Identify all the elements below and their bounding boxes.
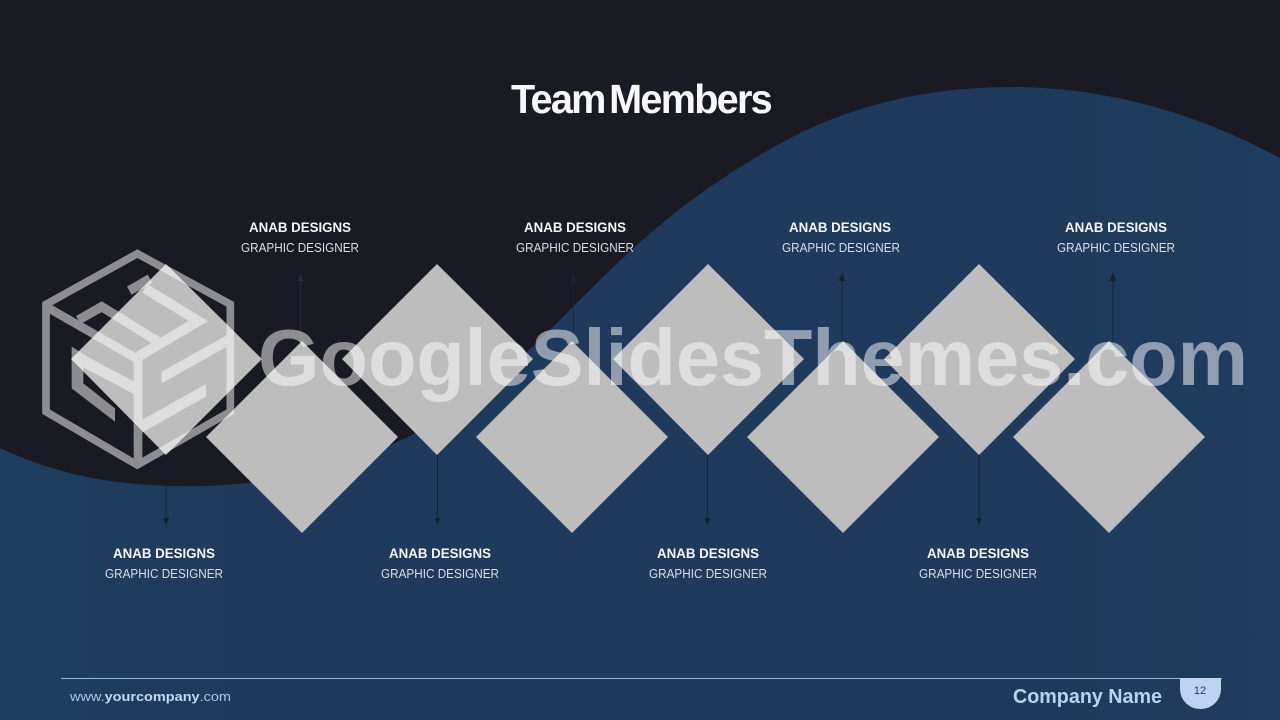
team member label: bottom 4 bbox=[919, 545, 1037, 581]
team member label: top 3: ANAB DESIGNS bbox=[789, 219, 891, 235]
team member label: top 1: ANAB DESIGNS bbox=[249, 219, 351, 235]
team member label: bottom 3: ANAB DESIGNS bbox=[657, 545, 759, 561]
watermark logo: hexagonal cube bbox=[46, 254, 230, 465]
team member label: top 2 bbox=[516, 219, 634, 255]
footer website: www. yourcompany .com bbox=[69, 689, 231, 704]
team member label: bottom 1: GRAPHIC DESIGNER bbox=[105, 566, 223, 581]
team member label: top 1 bbox=[241, 219, 359, 255]
team member label: bottom 1: ANAB DESIGNS bbox=[113, 545, 215, 561]
title: Team Members bbox=[511, 76, 772, 122]
team member label: top 2: GRAPHIC DESIGNER bbox=[516, 240, 634, 255]
team member label: bottom 2 bbox=[381, 545, 499, 581]
watermark text: GoogleSlidesThemes.com bbox=[258, 313, 1248, 402]
team member label: top 3: GRAPHIC DESIGNER bbox=[782, 240, 900, 255]
team member label: top 2: ANAB DESIGNS bbox=[524, 219, 626, 235]
team member label: top 4 bbox=[1057, 219, 1175, 255]
team member label: bottom 4: GRAPHIC DESIGNER bbox=[919, 566, 1037, 581]
arrows connecting diamonds to labels bbox=[163, 273, 1116, 525]
team member label: top 4: GRAPHIC DESIGNER bbox=[1057, 240, 1175, 255]
footer rule bbox=[61, 678, 1222, 679]
team member label: bottom 1 bbox=[105, 545, 223, 581]
diamond photo placeholders bbox=[71, 264, 1205, 533]
team member label: top 3 bbox=[782, 219, 900, 255]
page number badge bbox=[1180, 678, 1221, 709]
team member label: top 1: GRAPHIC DESIGNER bbox=[241, 240, 359, 255]
team member label: bottom 2: GRAPHIC DESIGNER bbox=[381, 566, 499, 581]
page number badge: 12 bbox=[1194, 685, 1206, 697]
team member label: bottom 2: ANAB DESIGNS bbox=[389, 545, 491, 561]
team member label: bottom 4: ANAB DESIGNS bbox=[927, 545, 1029, 561]
team member label: top 4: ANAB DESIGNS bbox=[1065, 219, 1167, 235]
team member label: bottom 3: GRAPHIC DESIGNER bbox=[649, 566, 767, 581]
team member label: bottom 3 bbox=[649, 545, 767, 581]
footer company name: Company Name bbox=[1013, 686, 1162, 708]
